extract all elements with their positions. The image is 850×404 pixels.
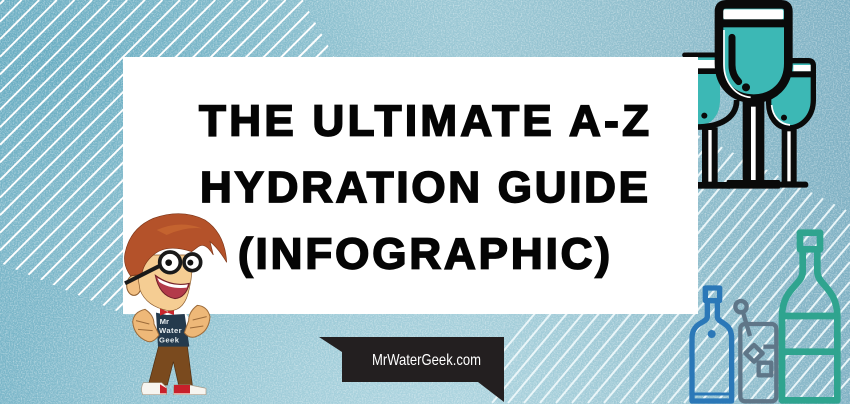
hair (124, 214, 227, 276)
ribbon banner (319, 337, 504, 402)
diagonal stripes: bottom right (492, 135, 850, 404)
shoes (141, 383, 167, 395)
right fist (184, 305, 210, 337)
vest (156, 313, 189, 347)
ear (127, 275, 141, 295)
left fist (133, 309, 159, 342)
icon: left wine glass (685, 55, 737, 189)
icon: centre wine glass (719, 4, 788, 189)
title (199, 96, 649, 278)
title line 3: (INFOGRAPHIC) (238, 230, 610, 278)
icon: glass with ice and straw (735, 301, 776, 401)
icon: blue bottle (692, 288, 732, 401)
banner text: MrWaterGeek.com (372, 352, 481, 369)
vest text (159, 317, 182, 345)
vest text: Water (159, 326, 182, 335)
title line 2: HYDRATION GUIDE (200, 163, 648, 212)
mouth (155, 275, 189, 299)
bow tie (160, 307, 174, 316)
icon: right wine glass (767, 61, 813, 188)
face (138, 255, 192, 311)
glasses (125, 266, 160, 283)
title line 1: THE ULTIMATE A-Z (199, 96, 649, 146)
shirt (147, 310, 192, 332)
vest text: Mr (160, 317, 169, 326)
teeth (157, 278, 188, 288)
title panel (123, 57, 698, 314)
legs (148, 346, 192, 385)
vest text: Geek (159, 336, 180, 345)
mascot: Mr Water Geek (124, 214, 227, 395)
hair highlight (157, 225, 202, 235)
diagonal stripes: top left (0, 0, 334, 314)
icon: green bottle (782, 233, 837, 400)
